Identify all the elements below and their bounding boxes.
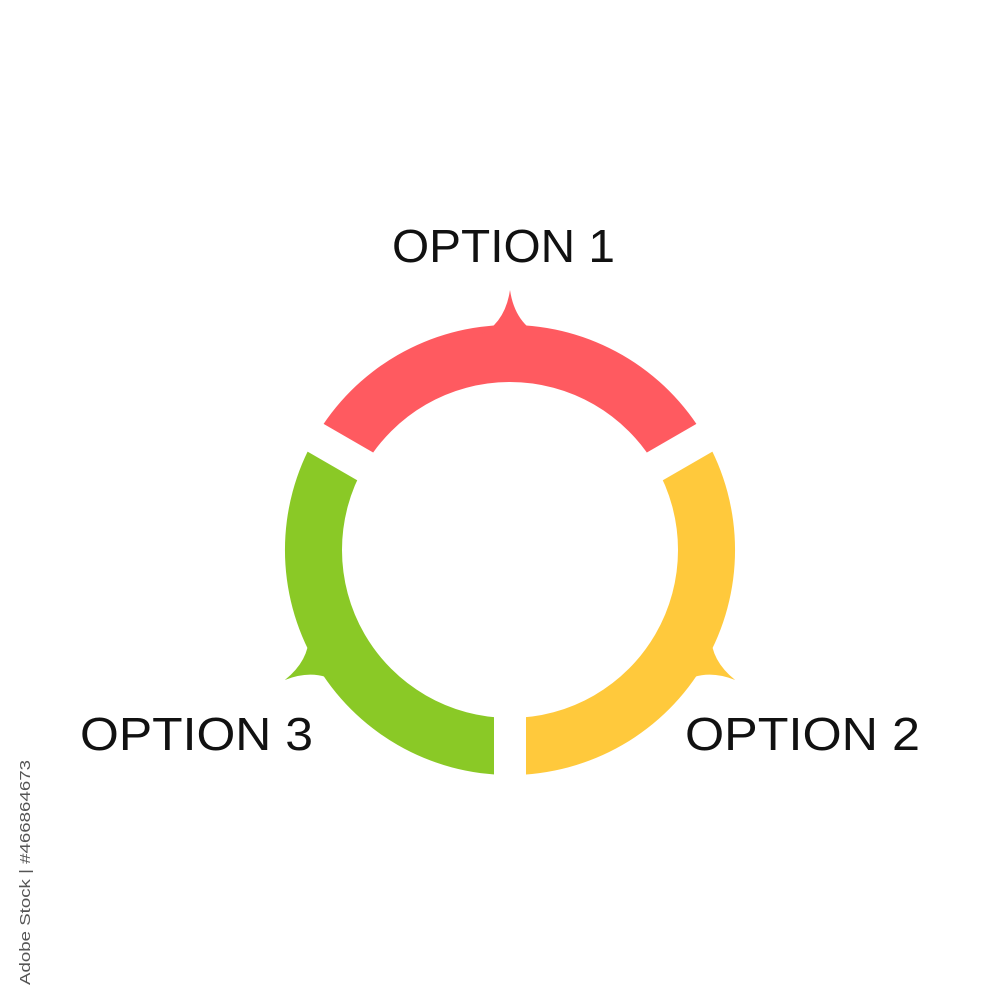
segment: option 3 (green)	[269, 438, 510, 775]
label: option 3: OPTION 3	[80, 708, 313, 760]
segment: option 2 (yellow)	[510, 438, 751, 775]
label: option 2: OPTION 2	[685, 708, 920, 760]
cycle diagram	[269, 290, 751, 800]
segment: option 1 (red)	[315, 290, 705, 466]
label: option 1: OPTION 1	[392, 220, 615, 272]
stock id text: Adobe Stock | #466864673	[17, 760, 34, 985]
